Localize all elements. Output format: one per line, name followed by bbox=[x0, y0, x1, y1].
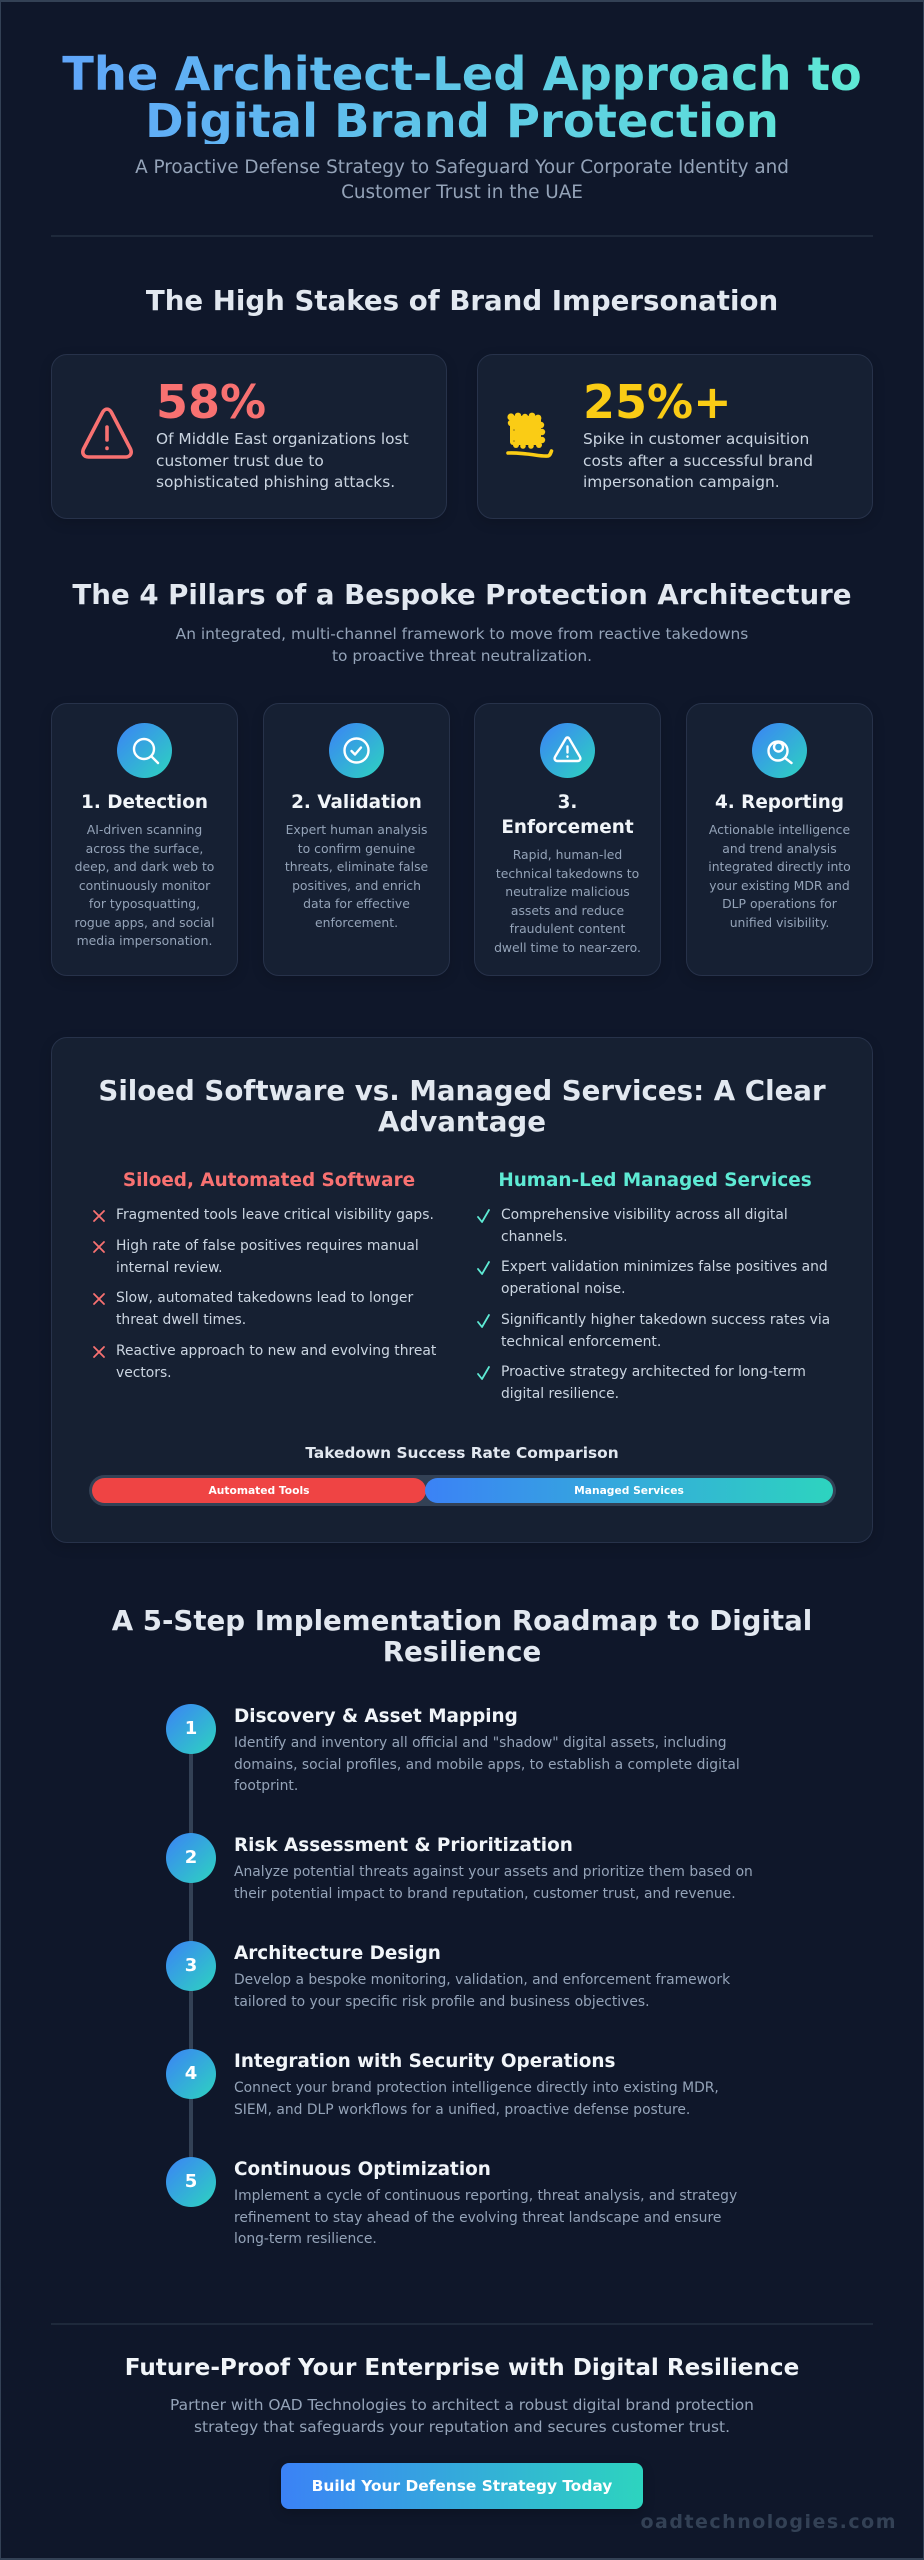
list item: technical enforcement. bbox=[501, 1334, 661, 1350]
list item: threat dwell times. bbox=[116, 1312, 246, 1328]
step text: long-term resilience. bbox=[234, 2231, 377, 2247]
bar chart: takedown success bbox=[89, 1475, 836, 1506]
column: managed bbox=[477, 1170, 830, 1402]
panel: pillar 1 bbox=[51, 703, 238, 976]
pillar title: 2. Validation bbox=[291, 792, 422, 813]
pillars intro bbox=[176, 625, 748, 665]
pillar text: assets and reduce bbox=[511, 902, 624, 918]
pillar text bbox=[285, 822, 428, 930]
list item bbox=[501, 1312, 830, 1350]
pillar text bbox=[494, 847, 641, 954]
list item: Reactive approach to new and evolving threat bbox=[116, 1343, 436, 1359]
pillar text: for typosquatting, bbox=[89, 896, 200, 911]
pillar text: fraudulent content bbox=[510, 921, 625, 936]
step 3 bbox=[166, 1941, 730, 2010]
list item bbox=[116, 1290, 414, 1328]
pillar text: media impersonation. bbox=[77, 933, 212, 948]
step 5 bbox=[166, 2157, 737, 2247]
bar: automated tools bbox=[92, 1478, 426, 1503]
list item: Comprehensive visibility across all digital bbox=[501, 1207, 788, 1223]
pillar text: rogue apps, and social bbox=[75, 914, 214, 930]
step number bbox=[166, 1833, 216, 1883]
step number: 2 bbox=[185, 1847, 197, 1868]
footer heading: Future-Proof Your Enterprise with Digital Resilience bbox=[125, 2355, 799, 2381]
stat text: customer trust due to bbox=[156, 452, 324, 470]
list item bbox=[501, 1364, 806, 1402]
step text: Analyze potential threats against your assets and prioritize them based on bbox=[234, 1864, 753, 1880]
step text bbox=[234, 1735, 740, 1794]
pillar title: 3. bbox=[558, 792, 577, 813]
comparison heading: Advantage bbox=[378, 1105, 546, 1138]
pillar text: Expert human analysis bbox=[286, 822, 427, 837]
list item: Proactive strategy architected for long-term bbox=[501, 1364, 806, 1380]
stat number: 58% bbox=[156, 375, 266, 429]
pillar text: to confirm genuine bbox=[298, 840, 415, 856]
list item: Expert validation minimizes false positives and bbox=[501, 1259, 828, 1275]
panel: pillar 2 bbox=[263, 703, 450, 976]
list item bbox=[116, 1238, 419, 1276]
pillar text: Actionable intelligence bbox=[709, 822, 850, 837]
panel: stat 58% bbox=[51, 354, 447, 519]
step number bbox=[166, 2157, 216, 2207]
icon: warning triangle bbox=[81, 407, 133, 459]
footer text: Partner with OAD Technologies to architect a robust digital brand protection bbox=[170, 2396, 754, 2414]
bar: managed services: Managed Services bbox=[574, 1484, 684, 1497]
icon: report search bbox=[752, 723, 807, 778]
column title: Human-Led Managed Services bbox=[498, 1170, 812, 1191]
step number: 3 bbox=[185, 1955, 197, 1976]
step text: Identify and inventory all official and "shadow" digital assets, including bbox=[234, 1735, 727, 1751]
pillar text: deep, and dark web to bbox=[75, 859, 214, 874]
watermark: oadtechnologies.com bbox=[640, 2511, 897, 2533]
pillar title bbox=[501, 792, 634, 838]
heading: roadmap: A 5-Step Implementation Roadmap to Digital bbox=[112, 1604, 812, 1637]
pillar text: positives, and enrich bbox=[292, 878, 421, 892]
step number: 5 bbox=[185, 2171, 197, 2192]
icons: checks bbox=[477, 1209, 490, 1380]
step text: tailored to your specific risk profile and business objectives. bbox=[234, 1994, 649, 2010]
step text bbox=[234, 2080, 719, 2118]
list item: vectors. bbox=[116, 1365, 172, 1381]
pillar text: your existing MDR and bbox=[709, 878, 850, 892]
heading: high stakes: The High Stakes of Brand Impersonation bbox=[146, 284, 778, 317]
column: software bbox=[93, 1170, 436, 1381]
step number bbox=[166, 2049, 216, 2099]
title: The Architect-Led Approach to bbox=[62, 47, 862, 101]
pillar text: dwell time to near-zero. bbox=[494, 940, 641, 954]
list item: High rate of false positives requires manual bbox=[116, 1238, 419, 1254]
list item bbox=[116, 1343, 436, 1381]
bar: managed services bbox=[425, 1478, 833, 1503]
pillars intro: An integrated, multi-channel framework to move from reactive takedowns bbox=[176, 625, 748, 643]
footer text bbox=[170, 2396, 754, 2436]
pillar text: integrated directly into bbox=[708, 859, 851, 874]
step title: Integration with Security Operations bbox=[234, 2051, 615, 2072]
subtitle: Customer Trust in the UAE bbox=[341, 182, 583, 203]
step text: footprint. bbox=[234, 1778, 298, 1794]
pillar text: Rapid, human-led bbox=[513, 847, 622, 862]
list item: Significantly higher takedown success rates via bbox=[501, 1312, 830, 1328]
footer text: strategy that safeguards your reputation and secures customer trust. bbox=[194, 2418, 730, 2436]
stat text: Spike in customer acquisition bbox=[583, 430, 809, 448]
comparison heading: Siloed Software vs. Managed Services: A Clear bbox=[98, 1074, 826, 1107]
list item: internal review. bbox=[116, 1260, 223, 1276]
step text: Connect your brand protection intelligence directly into existing MDR, bbox=[234, 2080, 719, 2096]
pillar text: continuously monitor bbox=[79, 878, 210, 892]
timeline connector bbox=[189, 1729, 193, 2181]
pillar text: across the surface, bbox=[86, 840, 203, 856]
stat text: costs after a successful brand bbox=[583, 452, 813, 470]
icon: garbled yellow chart bbox=[506, 412, 554, 458]
step 2 bbox=[166, 1833, 753, 1902]
step 1 bbox=[166, 1704, 740, 1794]
step number: 1 bbox=[185, 1718, 197, 1739]
pillar text bbox=[708, 822, 851, 930]
step text bbox=[234, 1972, 730, 2010]
list item bbox=[501, 1259, 828, 1297]
heading: four pillars: The 4 Pillars of a Bespoke Protection Architecture bbox=[72, 578, 852, 611]
pillar title: 4. Reporting bbox=[715, 792, 844, 813]
icons: crosses bbox=[93, 1210, 105, 1358]
pillar text: and trend analysis bbox=[722, 840, 837, 856]
step text: SIEM, and DLP workflows for a unified, proactive defense posture. bbox=[234, 2102, 690, 2118]
step number: 4 bbox=[185, 2063, 197, 2084]
step text: refinement to stay ahead of the evolving threat landscape and ensure bbox=[234, 2210, 721, 2226]
bar: automated tools: Automated Tools bbox=[208, 1484, 310, 1497]
pillar text bbox=[75, 822, 214, 948]
list item: Slow, automated takedowns lead to longer bbox=[116, 1290, 413, 1306]
step text: their potential impact to brand reputation, customer trust, and revenue. bbox=[234, 1886, 736, 1902]
pillar text: DLP operations for bbox=[722, 896, 837, 911]
panel: pillar 3 bbox=[474, 703, 661, 976]
step number bbox=[166, 1941, 216, 1991]
step title: Continuous Optimization bbox=[234, 2159, 491, 2180]
pillar text: neutralize malicious bbox=[505, 884, 630, 899]
panel: comparison bbox=[51, 1037, 873, 1543]
step number bbox=[166, 1704, 216, 1754]
step title: Risk Assessment & Prioritization bbox=[234, 1835, 573, 1856]
list item bbox=[501, 1207, 788, 1245]
heading: roadmap: Resilience bbox=[383, 1635, 541, 1668]
list item: Fragmented tools leave critical visibility gaps. bbox=[116, 1207, 434, 1223]
pillar text: enforcement. bbox=[315, 914, 398, 930]
call to action button: Build Your Defense Strategy Today bbox=[312, 2477, 612, 2495]
icon: alert triangle bbox=[540, 723, 595, 778]
step 4 bbox=[166, 2049, 719, 2118]
chart title: Takedown Success Rate Comparison bbox=[305, 1444, 619, 1462]
pillars intro: to proactive threat neutralization. bbox=[332, 647, 592, 665]
icon: check circle bbox=[329, 723, 384, 778]
pillar title: 1. Detection bbox=[81, 792, 208, 813]
stat text bbox=[583, 430, 813, 491]
subtitle bbox=[135, 157, 789, 203]
step text: domains, social profiles, and mobile apps, to establish a complete digital bbox=[234, 1757, 740, 1773]
step text: Implement a cycle of continuous reporting, threat analysis, and strategy bbox=[234, 2188, 737, 2204]
comparison heading bbox=[98, 1074, 826, 1138]
call to action button bbox=[281, 2463, 643, 2509]
pillar text: AI-driven scanning bbox=[87, 822, 202, 837]
list item: operational noise. bbox=[501, 1281, 626, 1297]
stat text: Of Middle East organizations lost bbox=[156, 430, 409, 448]
step text: Develop a bespoke monitoring, validation, and enforcement framework bbox=[234, 1972, 730, 1988]
pillar text: technical takedowns to bbox=[496, 866, 639, 880]
panel: pillar 4 bbox=[686, 703, 873, 976]
list item: channels. bbox=[501, 1229, 567, 1245]
step text bbox=[234, 2188, 737, 2247]
stat text: impersonation campaign. bbox=[583, 473, 780, 491]
stat text: sophisticated phishing attacks. bbox=[156, 473, 395, 491]
pillar text: unified visibility. bbox=[730, 914, 829, 930]
title bbox=[52, 51, 872, 144]
stat text bbox=[156, 430, 409, 491]
pillar text: threats, eliminate false bbox=[285, 859, 428, 874]
title: Digital Brand Protection bbox=[145, 94, 779, 148]
heading: roadmap bbox=[112, 1604, 812, 1668]
subtitle: A Proactive Defense Strategy to Safeguard Your Corporate Identity and bbox=[135, 157, 789, 178]
pillar title: Enforcement bbox=[501, 817, 634, 838]
header bbox=[62, 47, 862, 203]
step text bbox=[234, 1864, 753, 1902]
panel: stat 25%+ bbox=[477, 354, 873, 519]
pillar text: data for effective bbox=[303, 896, 410, 911]
step title: Architecture Design bbox=[234, 1943, 441, 1964]
column title: Siloed, Automated Software bbox=[123, 1170, 415, 1191]
stat number: 25%+ bbox=[583, 375, 732, 429]
step title: Discovery & Asset Mapping bbox=[234, 1706, 518, 1727]
list item: digital resilience. bbox=[501, 1386, 619, 1402]
icon: search bbox=[117, 723, 172, 778]
